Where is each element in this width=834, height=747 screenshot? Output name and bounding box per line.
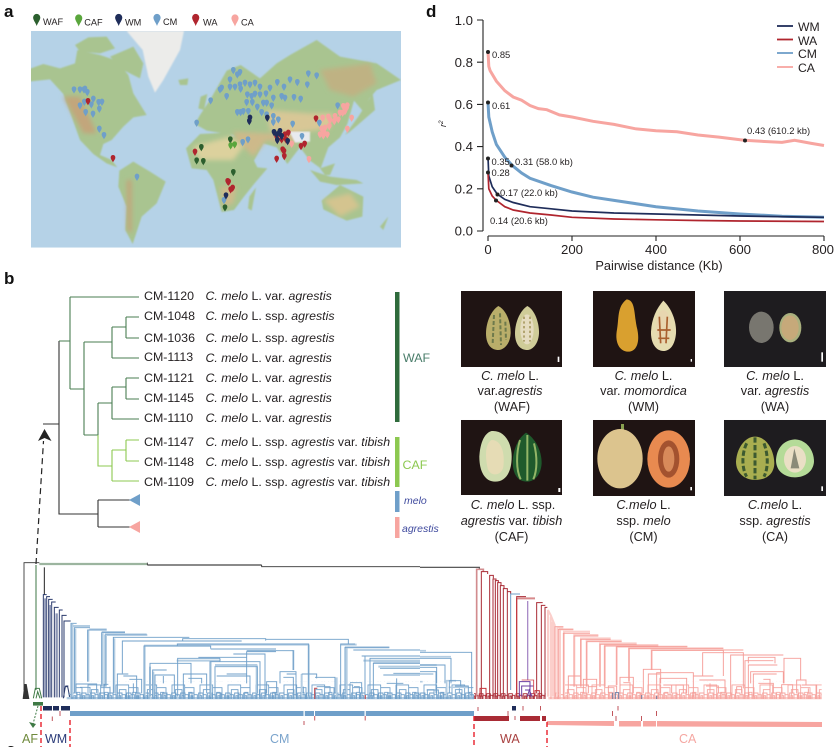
y axis: 0.0 [455, 224, 473, 238]
y axis [455, 13, 483, 238]
clade bar: WAF: WAF [403, 351, 430, 365]
data point annotations: 0.35 [492, 156, 510, 167]
x axis: 600 [729, 242, 751, 257]
photo: WA fruit [724, 291, 826, 367]
tree branches: CAF clade [98, 435, 139, 481]
pins: WA [86, 98, 318, 194]
navy ticks [512, 706, 516, 710]
captions for fruit photographs: (WAF) [494, 400, 530, 414]
captions for fruit photographs: C.melo L. [616, 498, 671, 512]
captions for fruit photographs: var. momordica [600, 384, 687, 398]
captions for fruit photographs [461, 369, 811, 544]
pins: WM [224, 115, 290, 200]
CA thin branches [555, 627, 817, 697]
chart legend [777, 20, 820, 75]
taxon names: C. melo L. ssp. agrestis var. tibish [206, 435, 390, 449]
panel: accession dendrogram left [23, 563, 420, 699]
captions for fruit photographs: var.agrestis [478, 384, 543, 398]
CM thin branches [71, 623, 420, 697]
panel label b: b [4, 269, 14, 288]
collapsed clade: melo [129, 494, 140, 506]
panel: LD decay chart [438, 13, 834, 273]
CA small branch pattern [550, 689, 822, 699]
map legend: CAF [84, 18, 103, 28]
collapsed clade: agrestis [129, 521, 140, 533]
group label WM: WM [45, 732, 67, 746]
WA staircase [474, 569, 547, 699]
data point annotations: 0.85 [492, 49, 510, 60]
accession labels: CM-1121 [144, 371, 194, 385]
captions for fruit photographs: ssp. agrestis [739, 514, 811, 528]
tree branches: WAF clade [59, 297, 139, 435]
map legend: WA [203, 18, 218, 28]
group boundary dashes [41, 706, 547, 747]
y axis title: r [438, 124, 448, 127]
map legend: WAF [43, 17, 63, 27]
CM small branch pattern [68, 689, 420, 699]
x axis: 0 [484, 242, 492, 257]
accession labels: CM-1109 [144, 475, 194, 489]
chart legend: WA [798, 34, 818, 48]
curve WA [488, 172, 824, 222]
purple clade [519, 601, 534, 697]
CA pale thick branches [548, 610, 743, 697]
pins: CA [289, 102, 354, 163]
misassigned accession ticks [52, 706, 657, 725]
data point markers [486, 50, 747, 202]
x axis: 800 [812, 242, 834, 257]
x axis [484, 236, 834, 257]
accession labels: CM-1113 [144, 350, 193, 364]
clade bar: CAF: CAF [402, 458, 428, 472]
data point annotations: 0.14 (20.6 kb) [490, 215, 548, 226]
taxon names: C. melo L. var. agrestis [206, 371, 332, 385]
panel label a: a [4, 2, 14, 21]
y axis: 0.6 [455, 97, 473, 112]
WM staircase [43, 595, 71, 698]
assignment bar: CM [70, 711, 474, 716]
taxon names: C. melo L. var. agrestis [206, 289, 332, 303]
photo: WAF fruit [461, 291, 562, 367]
captions for fruit photographs: (CM) [629, 530, 658, 544]
AF clade [33, 688, 42, 698]
data point annotations: 0.43 (610.2 kb) [747, 125, 810, 136]
clade bar: CAF [395, 437, 428, 487]
clade bar: agrestis: agrestis [402, 523, 440, 535]
captions for fruit photographs: ssp. melo [616, 514, 671, 528]
photo: CM fruit [593, 420, 695, 496]
data point annotations: 0.17 (22.0 kb) [500, 187, 558, 198]
accession labels: CM-1147 [144, 435, 194, 449]
group label CA: CA [679, 732, 697, 746]
CM mid branch pattern [75, 682, 420, 699]
panel: fruit photographs [461, 291, 826, 496]
misplaced accessions in CA [613, 693, 657, 699]
dashed arrow from tree to clade [36, 429, 52, 564]
accession labels [144, 289, 195, 489]
curve CA [488, 52, 824, 146]
taxon names: C. melo L. var. agrestis [206, 351, 332, 365]
assignment bar: CA [547, 721, 822, 727]
y axis: 0.4 [455, 139, 473, 154]
curve WM [488, 157, 824, 217]
accession labels: CM-1145 [144, 391, 194, 405]
CM baseline band [67, 697, 420, 699]
accession labels: CM-1110 [144, 411, 193, 425]
captions for fruit photographs: C. melo L. ssp. [471, 498, 555, 512]
x axis title: Pairwise distance (Kb) [595, 258, 723, 273]
taxon names: C. melo L. ssp. agrestis [206, 331, 334, 345]
pins: WAF and CAF [194, 136, 237, 212]
root branches [23, 563, 420, 699]
y axis: 0.2 [455, 182, 473, 196]
data point annotations [490, 49, 810, 226]
panel: accession dendrogram right [420, 567, 822, 699]
panel: world map [28, 31, 401, 248]
chart legend: CA [798, 61, 816, 75]
taxon names: C. melo L. ssp. agrestis [206, 309, 334, 323]
panel label d: d [426, 2, 436, 21]
y axis title: 2 [438, 120, 445, 125]
chart legend: CM [798, 47, 817, 61]
taxon names: C. melo L. var. agrestis [206, 391, 332, 405]
clade bar: melo: melo [404, 495, 427, 507]
CM branches continued [420, 651, 474, 699]
captions for fruit photographs: agrestis var. tibish [461, 514, 562, 528]
x axis: 200 [561, 242, 583, 257]
CM pale thick branches [71, 624, 420, 697]
captions for fruit photographs: C.melo L. [748, 498, 802, 512]
CA baseline band [548, 697, 822, 699]
captions for fruit photographs: (WA) [761, 400, 789, 414]
clade bar: agrestis [395, 517, 440, 538]
tree branches: dark root [43, 341, 130, 527]
accession labels: CM-1036 [144, 331, 195, 345]
misplaced WA accession in CM [315, 688, 365, 699]
green dotted arrow [29, 706, 38, 728]
data point annotations: 0.28 [492, 167, 510, 178]
captions for fruit photographs: C. melo L. [615, 369, 672, 383]
accession labels: CM-1120 [144, 289, 194, 303]
taxon names: C. melo L. var. agrestis [206, 411, 332, 425]
root branch end [420, 567, 479, 569]
curve CM [488, 102, 824, 217]
y axis: 0.8 [455, 55, 473, 70]
clade bar: melo [395, 491, 427, 512]
chart legend: WM [798, 20, 820, 34]
group label WA: WA [500, 732, 520, 746]
y axis: 1.0 [455, 13, 473, 28]
taxon names: C. melo L. ssp. agrestis var. tibish [206, 455, 390, 469]
taxon names: C. melo L. ssp. agrestis var. tibish [206, 475, 390, 489]
misplaced red accessions [480, 688, 539, 697]
x axis: 400 [645, 242, 667, 257]
accession labels: CM-1148 [144, 455, 194, 469]
clade bar: WAF [395, 292, 430, 422]
accession labels: CM-1048 [144, 309, 195, 323]
photo: CA fruit [724, 420, 826, 496]
photo: CAF fruit [461, 420, 562, 495]
map legend [33, 14, 255, 28]
assignment bar: AF [33, 702, 43, 706]
map legend: CA [241, 18, 255, 28]
captions for fruit photographs: (CAF) [495, 530, 528, 544]
data point annotations: 0.61 [492, 100, 510, 111]
taxon names [206, 289, 390, 489]
captions for fruit photographs: C. melo L. [481, 369, 539, 383]
captions for fruit photographs: (WM) [628, 400, 659, 414]
captions for fruit photographs: (CA) [762, 530, 788, 544]
group label CM: CM [270, 732, 289, 746]
assignment bar: WM [43, 706, 70, 710]
CA mid branch pattern [557, 682, 822, 699]
captions for fruit photographs: C. melo L. [746, 369, 804, 383]
map legend: WM [125, 18, 141, 28]
pins: CM [72, 67, 340, 204]
captions for fruit photographs: var. agrestis [741, 384, 810, 398]
assignment bar: WA [474, 716, 546, 721]
photo: WM fruit [593, 291, 695, 367]
panel: African clade tree [43, 289, 440, 538]
group label AF: AF [22, 732, 38, 746]
map legend: CM [163, 17, 177, 27]
data point annotations: 0.31 (58.0 kb) [515, 156, 573, 167]
